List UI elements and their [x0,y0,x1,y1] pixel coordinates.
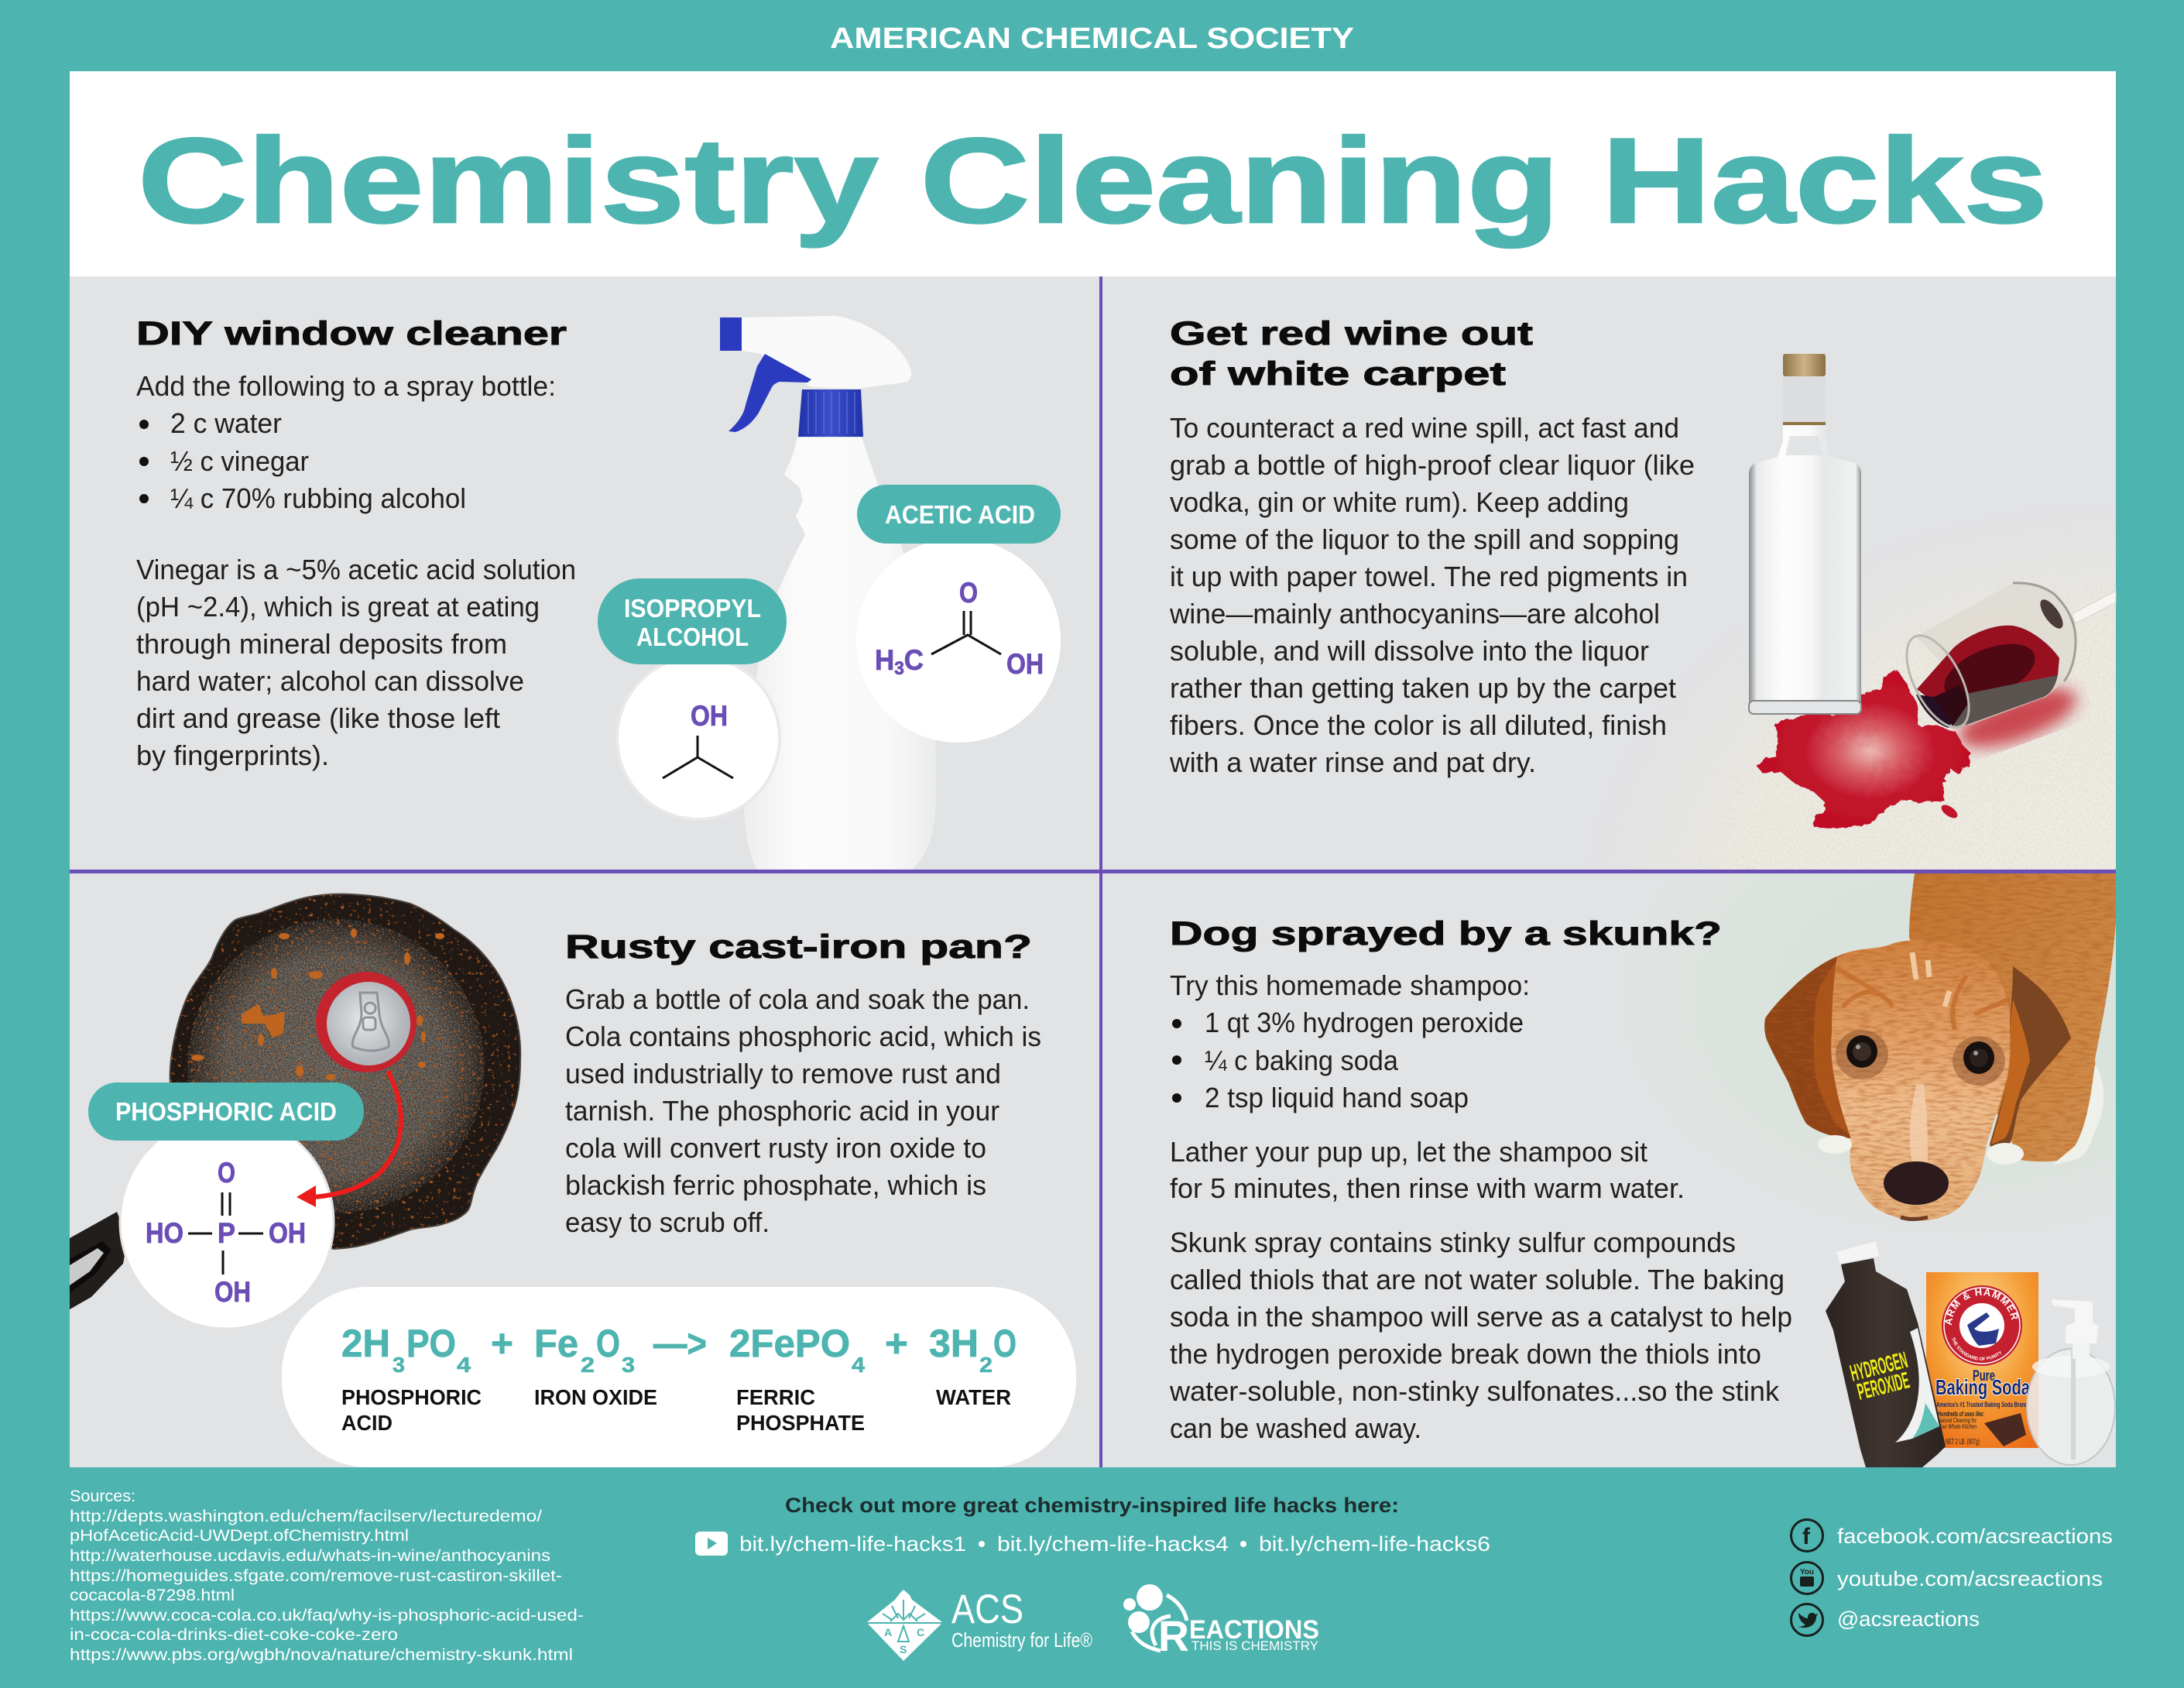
formula: PO [406,1322,456,1365]
icon: spray bottle [720,316,936,870]
molecule: isopropyl alcohol: OH [691,700,728,732]
text: red wine instructions: To counteract a red wine spill, act fast and [1170,412,1679,444]
text: explanation: (pH ~2.4), which is great at eating [136,591,540,623]
molecule: phosphoric acid: OH [269,1217,306,1249]
content background [70,276,2116,1467]
organization label: AMERICAN CHEMICAL SOCIETY [830,22,1354,55]
panel: rusty pan [70,894,1076,1467]
text: red wine instructions: soluble, and will dissolve into the liquor [1170,635,1649,667]
icon: baking soda box: ARM & HAMMER [1945,1288,2018,1326]
compound labels: IRON OXIDE [534,1385,657,1409]
logo: ACS [867,1587,1092,1661]
heading: rusty pan: Rusty cast-iron pan? [565,928,1032,966]
text: explanation: Vinegar is a ~5% acetic acid solution [136,554,576,585]
formula: 3 [622,1353,635,1377]
text: lather directions [1170,1136,1685,1204]
heading: window cleaner: DIY window cleaner [136,315,567,352]
icon: hydrogen peroxide bottle: HYDROGEN [1847,1347,1910,1387]
logo: Reactions [1123,1584,1319,1660]
compound labels: ACID [341,1411,393,1435]
logo: ACS: A [884,1626,892,1638]
text: rusty pan instructions: tarnish. The phosphoric acid in your [565,1095,999,1127]
formula: O [596,1322,620,1365]
footer: more hacks: bit.ly/chem-life-hacks1 [739,1532,966,1556]
icon: hydrogen peroxide bottle: PEROXIDE [1855,1367,1912,1405]
illustration: cast-iron pan [70,894,520,1309]
formula: + [885,1322,908,1365]
formula: —> [653,1322,707,1365]
text: lather directions: Lather your pup up, let the shampoo sit [1170,1136,1647,1168]
footer: social links: facebook.com/acsreactions [1837,1525,2113,1548]
footer: sources: https://www.pbs.org/wgbh/nova/nature/chemistry-skunk.html [70,1646,573,1664]
icon: baking soda box: America's #1 Trusted Baking Soda Brand [1936,1401,2028,1408]
icon: cola can [316,972,417,1072]
formula: 2FePO [729,1322,850,1365]
molecule: acetic acid: OH [1006,648,1044,680]
panel: skunk [1169,873,2116,1467]
text: lather directions: for 5 minutes, then rinse with warm water. [1170,1172,1685,1204]
text: skunk chemistry: called thiols that are not water soluble. The baking [1170,1264,1785,1295]
footer: sources: https://www.coca-cola.co.uk/faq/why-is-phosphoric-acid-used- [70,1607,584,1625]
text: shampoo recipe: 2 tsp liquid hand soap [1205,1082,1469,1113]
text: red wine instructions: wine—mainly anthocyanins—are alcohol [1169,598,1660,630]
logo: Reactions: THIS IS CHEMISTRY [1191,1638,1318,1653]
footer: sources: in-coca-cola-drinks-diet-coke-coke-zero [70,1626,398,1644]
formula: 4 [852,1353,865,1377]
photo: carpet [1652,562,2116,870]
text: red wine instructions: grab a bottle of high-proof clear liquor (like [1170,449,1695,481]
text: explanation: dirt and grease (like those left [136,702,500,734]
formula: 3 [393,1353,405,1377]
callout: acetic acid: ACETIC ACID [885,500,1035,529]
heading: red wine: Get red wine out [1170,315,1533,352]
icon: youtube channel: You [1800,1568,1814,1576]
formula: + [491,1322,513,1365]
footer: more hacks [695,1494,1490,1556]
compound labels [341,1385,1011,1435]
footer: sources: http://depts.washington.edu/chem/facilserv/lecturedemo/ [70,1508,542,1525]
callout: phosphoric acid: PHOSPHORIC ACID [115,1097,337,1126]
molecule: acetic acid: 3 [894,658,904,679]
text: explanation: by fingerprints). [136,739,329,771]
illustration: liquor bottle [1749,354,1861,714]
panel: red wine [1169,315,2184,1324]
icon: baking soda box: Natural Cleaning for [1938,1417,1977,1424]
text: red wine instructions [1169,412,1695,778]
text: recipe: Add the following to a spray bottle: [136,370,556,402]
logo: ACS: ACS [951,1587,1023,1632]
text: shampoo recipe: Try this homemade shampoo: [1170,969,1530,1001]
text: rusty pan instructions: blackish ferric phosphate, which is [565,1169,986,1201]
callout: isopropyl alcohol [598,578,787,819]
heading: red wine: of white carpet [1170,355,1506,393]
text: skunk chemistry: soda in the shampoo will serve as a catalyst to help [1170,1301,1792,1333]
text: red wine instructions: rather than getting taken up by the carpet [1170,672,1676,704]
footer: social links [1791,1519,2113,1635]
formula: 2 [581,1353,595,1377]
text: red wine instructions: with a water rinse and pat dry. [1169,746,1536,778]
title banner [70,71,2116,276]
footer: more hacks: Check out more great chemistry-inspired life hacks here: [785,1494,1399,1517]
text: shampoo recipe: ¼ c baking soda [1205,1045,1399,1076]
text: recipe: 2 c water [170,407,282,439]
footer: sources: Sources: [70,1487,135,1505]
photo: dog in suds [1721,873,2116,1221]
formula: 2 [979,1353,993,1377]
molecule: isopropyl alcohol [663,700,733,778]
callout: acetic acid [856,485,1061,743]
molecule: phosphoric acid: O [218,1157,235,1189]
icon: baking soda box: Hundreds of uses like: [1938,1410,1984,1418]
footer: social links: youtube.com/acsreactions [1837,1567,2103,1590]
icon: baking soda box: Your Whole Kitchen [1938,1423,1977,1430]
arrow: can to molecule [297,1071,401,1207]
compound labels: WATER [936,1385,1011,1409]
chemical equation [282,1287,1076,1467]
compound labels: PHOSPHORIC [341,1385,482,1409]
icon: baking soda box: Baking Soda [1935,1375,2030,1399]
text: rusty pan instructions: Grab a bottle of cola and soak the pan. [565,983,1030,1015]
icon: facebook [1791,1519,1822,1552]
icon: youtube channel [1791,1563,1822,1594]
text: recipe: ½ c vinegar [170,445,309,477]
text: rusty pan instructions: used industrially to remove rust and [565,1058,1001,1089]
heading: red wine [1170,315,1533,393]
footer: more hacks: bit.ly/chem-life-hacks4 [997,1532,1229,1556]
icon: baking soda box: NET 2 LB. (907g) [1946,1438,1980,1446]
dividers [70,276,2116,1467]
text: skunk chemistry: can be washed away. [1170,1412,1421,1444]
icon: facebook: f [1802,1524,1811,1549]
text: recipe: ¼ c 70% rubbing alcohol [170,482,466,514]
text: explanation: through mineral deposits from [136,628,507,660]
logo: ACS: Chemistry for Life® [951,1628,1092,1652]
text: shampoo recipe: 1 qt 3% hydrogen peroxide [1205,1007,1524,1038]
molecule: phosphoric acid: P [218,1217,235,1249]
illustration: wine glass [1894,583,2116,737]
footer: sources: cocacola-87298.html [70,1587,235,1604]
formula: Fe [534,1322,578,1365]
icon: soap pump bottle [2027,1299,2115,1465]
formula: 4 [457,1353,471,1377]
text: rusty pan instructions: Cola contains phosphoric acid, which is [565,1021,1041,1052]
formula: 2H [341,1322,390,1365]
footer: sources: https://homeguides.sfgate.com/remove-rust-castiron-skillet- [70,1567,562,1585]
molecule: phosphoric acid: HO [146,1217,183,1249]
text: shampoo recipe [1170,969,1530,1113]
footer: sources: pHofAceticAcid-UWDept.ofChemistry.html [70,1527,409,1545]
text: recipe [136,370,556,514]
logo: Reactions: EACTIONS [1189,1615,1319,1645]
logo: Reactions: R [1158,1611,1189,1660]
molecule: acetic acid: O [959,577,978,609]
footer: sources [70,1487,584,1664]
text: explanation: hard water; alcohol can dissolve [136,665,524,697]
icon: hydrogen peroxide bottle [1826,1241,1946,1467]
text: skunk chemistry: Skunk spray contains stinky sulfur compounds [1170,1227,1736,1258]
callout: isopropyl alcohol: ALCOHOL [636,623,749,651]
title: Chemistry Cleaning Hacks [138,114,2048,249]
formula: 3H [929,1322,979,1365]
callout: isopropyl alcohol: ISOPROPYL [624,594,761,623]
molecule: phosphoric acid: OH [214,1276,251,1308]
molecule: phosphoric acid [146,1157,306,1308]
text: red wine instructions: fibers. Once the color is all diluted, finish [1170,709,1667,741]
text: red wine instructions: it up with paper towel. The red pigments in [1170,561,1688,592]
icon: twitter [1791,1604,1822,1635]
text: rusty pan instructions [565,983,1041,1238]
formula: O [993,1322,1017,1365]
molecule: acetic acid: C [904,644,924,676]
logo: ACS: C [917,1626,924,1638]
text: skunk chemistry [1169,1227,1792,1444]
text: red wine instructions: vodka, gin or white rum). Keep adding [1170,486,1629,518]
heading: skunk: Dog sprayed by a skunk? [1170,915,1722,952]
footer: sources: http://waterhouse.ucdavis.edu/whats-in-wine/anthocyanins [70,1547,550,1565]
text: explanation [136,554,576,771]
text: red wine instructions: some of the liquor to the spill and sopping [1170,523,1679,555]
logo: ACS: S [900,1643,907,1655]
text: skunk chemistry: water-soluble, non-stinky sulfonates...so the stink [1169,1375,1780,1407]
formula [341,1322,1017,1377]
illustration: wine stain [1756,670,2083,829]
icon: baking soda box: Pure [1973,1368,1995,1384]
text: skunk chemistry: the hydrogen peroxide break down the thiols into [1170,1338,1761,1370]
callout: phosphoric acid [88,1082,364,1329]
panel: DIY window cleaner [136,315,1061,870]
molecule: acetic acid [875,577,1044,680]
icon: baking soda box [1926,1272,2038,1448]
compound labels: PHOSPHATE [736,1411,865,1435]
compound labels: FERRIC [736,1385,815,1409]
footer: more hacks: bit.ly/chem-life-hacks6 [1259,1532,1490,1556]
text: rusty pan instructions: cola will convert rusty iron oxide to [565,1132,986,1164]
icon: baking soda box: THE STANDARD OF PURITY [1952,1336,2001,1360]
text: rusty pan instructions: easy to scrub off. [565,1206,770,1238]
footer: social links: @acsreactions [1837,1607,1980,1631]
molecule: acetic acid: H [875,644,896,676]
icon: youtube [695,1532,728,1556]
